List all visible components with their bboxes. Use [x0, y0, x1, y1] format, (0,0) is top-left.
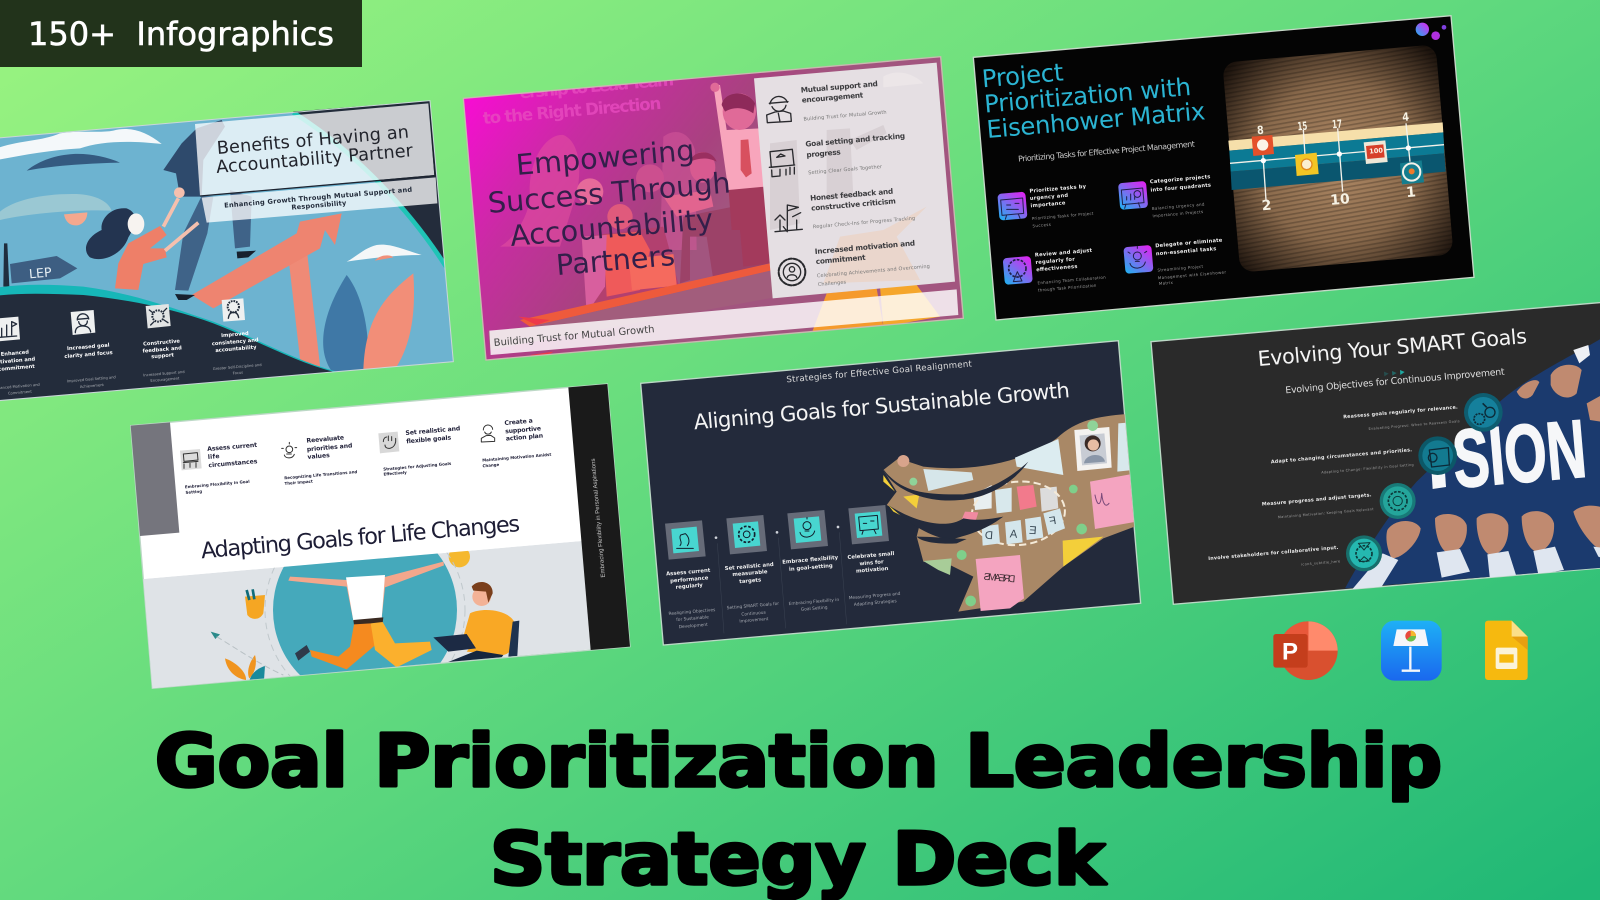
timeline image: 17	[1331, 117, 1343, 131]
step labels: wins for	[859, 559, 884, 567]
icon: PowerPoint	[1273, 621, 1338, 680]
bullet: prioritize tasks: Success	[1032, 222, 1051, 228]
benefit icons and labels: Achievement	[80, 383, 105, 389]
benefit icons and labels: Constructive	[143, 338, 181, 348]
step labels: circumstances	[208, 458, 258, 469]
illustration	[144, 541, 590, 688]
title: Partners	[555, 238, 676, 282]
timeline image: 1	[1405, 184, 1417, 201]
step labels: action plan	[506, 432, 543, 443]
timeline image	[1222, 44, 1454, 273]
photo: VISION team hands	[1345, 318, 1600, 590]
subtitle: Strategies for Effective Goal Realignment	[786, 359, 973, 385]
title: Empowering	[515, 133, 696, 182]
collage image: A	[1009, 528, 1018, 541]
benefit icons and labels: Commitment	[8, 390, 33, 396]
right info panel: Celebrating Achievements and Overcoming	[817, 264, 930, 279]
bullet: prioritize tasks: urgency and	[1030, 193, 1069, 202]
step labels: motivation	[856, 566, 889, 575]
bullet: review and adjust: through Task Prioritization	[1038, 283, 1097, 293]
title: Success Through	[486, 165, 732, 220]
step labels: Involve stakeholders for collaborative input.	[1208, 545, 1339, 562]
right sidebar	[568, 384, 630, 650]
decorative dots	[1416, 23, 1446, 40]
step captions: for Sustainable	[676, 614, 709, 623]
step labels: flexible goals	[406, 434, 452, 445]
bullet: delegate or eliminate: Delegate or eliminate	[1155, 238, 1223, 249]
right info panel: Setting Clear Goals Together	[808, 164, 883, 176]
panel: slide Evolving Your SMART Goals	[1151, 300, 1600, 604]
step captions: Embracing Flexibility in Goal	[185, 479, 250, 489]
step captions: Recognizing Life Transitions and	[284, 469, 358, 480]
benefit icons and labels: Improved Goal Setting and	[67, 375, 116, 383]
step captions: Adapting to Change: Flexibility in Goal Setting	[1321, 463, 1414, 475]
collage image	[883, 414, 1143, 612]
bullet: review and adjust	[1003, 248, 1106, 293]
title: Adapting Goals for Life Changes	[200, 511, 521, 564]
icon: PowerPoint: P	[1282, 638, 1298, 665]
title: Accountability	[509, 202, 714, 253]
title: Aligning Goals for Sustainable Growth	[693, 378, 1071, 434]
title box: Enhancing Growth Through Mutual Support and	[224, 186, 413, 210]
step labels: performance	[670, 575, 709, 585]
badge: 150+ Infographics	[0, 0, 362, 67]
subtitle: Evolving Objectives for Continuous Improvement	[1285, 367, 1505, 396]
step labels: Assess current	[207, 442, 257, 453]
bullet: delegate or eliminate: Management with Eisenhower	[1158, 269, 1227, 280]
right info panel: commitment	[815, 253, 866, 266]
bullet: prioritize tasks: importance	[1030, 200, 1066, 209]
bullet: delegate or eliminate: Matrix	[1159, 280, 1174, 286]
collage image: F	[1048, 515, 1057, 528]
benefit icons and labels: feedback and	[142, 345, 182, 355]
title box: Responsibility	[291, 199, 347, 212]
title	[486, 133, 732, 282]
step labels: Reassess goals regularly for relevance.	[1343, 405, 1458, 420]
step captions: Maintaining Motivation Amidst	[482, 452, 552, 463]
bullet: categorize projects	[1118, 174, 1211, 218]
step icons	[180, 425, 495, 470]
step labels: Create a	[504, 418, 533, 427]
right info panel: progress	[806, 147, 842, 159]
step icons	[665, 505, 889, 633]
benefit icons and labels: Greater Self-Discipline and	[213, 363, 262, 371]
right info panel: Increased motivation and	[814, 238, 915, 256]
bullet: categorize projects: Categorize projects	[1150, 174, 1211, 185]
right info panel: Honest feedback and	[810, 187, 894, 203]
step captions: Adapting Strategies	[854, 598, 898, 608]
panel: slide Adapting Goals for Life Changes	[131, 384, 630, 710]
right sidebar: Embracing Flexibility in Personal Aspirations	[591, 458, 607, 578]
step labels	[207, 418, 543, 469]
benefit icons and labels: support	[151, 352, 175, 360]
panel: slide Benefits of Having an Accountability Partner: LEP	[28, 264, 53, 281]
title: Eisenhower Matrix	[985, 96, 1206, 144]
bullet: delegate or eliminate: Streamlining Project	[1157, 264, 1204, 273]
bullet: delegate or eliminate	[1123, 238, 1227, 286]
title box: Benefits of Having an	[216, 123, 410, 159]
step icons	[1346, 393, 1503, 571]
step labels	[666, 551, 895, 591]
timeline image: 15	[1297, 119, 1308, 133]
title: Prioritization with	[983, 72, 1192, 119]
step labels: values	[307, 452, 330, 461]
step captions: Development	[678, 622, 708, 630]
collage image: D	[984, 530, 993, 542]
icon: Google Slides	[1485, 621, 1528, 680]
icon: Keynote	[1381, 621, 1442, 681]
step labels: Measure progress and adjust targets.	[1262, 492, 1372, 508]
title box	[195, 101, 437, 223]
step captions: Realigning Objectives	[668, 607, 716, 617]
badge: 150+ Infographics: 150+ Infographics	[28, 15, 334, 53]
bullet: categorize projects: into four quadrants	[1150, 182, 1211, 194]
caption bar	[489, 289, 958, 355]
benefit icons and labels: Improved	[221, 331, 249, 339]
right info panel: Challenges	[818, 280, 847, 288]
step captions: Evaluating Progress: When to Reassess Goals	[1368, 419, 1460, 431]
benefit icons and labels: accountability	[215, 345, 257, 354]
decorative triangles	[1384, 370, 1405, 376]
caption bar: Building Trust for Mutual Growth	[493, 324, 655, 349]
step labels: priorities and	[307, 442, 353, 453]
bullet: review and adjust: Review and adjust	[1035, 248, 1093, 259]
step captions: Improvement	[739, 616, 769, 625]
panel: slide Benefits of Having an Accountability Partner	[0, 100, 453, 404]
right info panel: encouragement	[801, 90, 864, 105]
step labels: Adapt to changing circumstances and priorities.	[1271, 447, 1412, 465]
bullet: categorize projects: Balancing Urgency and	[1152, 201, 1205, 211]
step captions: Change	[482, 462, 500, 468]
bullet: categorize projects: Importance in Projects	[1152, 209, 1203, 218]
timeline image: 10	[1330, 191, 1351, 209]
step labels: Set realistic and	[725, 562, 774, 572]
main title: Goal Prioritization Leadership	[155, 719, 1442, 803]
benefit icons and labels: Encouragement	[150, 376, 180, 383]
timeline image: 4	[1402, 109, 1410, 124]
timeline image: 100	[1369, 146, 1384, 156]
main title: Strategy Deck	[490, 817, 1107, 900]
panel: slide Empowering Success Through Accountability Partners: ership to Lead Team	[519, 70, 675, 102]
benefit icons and labels: Increased Support and	[143, 370, 185, 377]
right info panel: constructive criticism	[811, 196, 897, 213]
title: Evolving Your SMART Goals	[1257, 324, 1528, 371]
panel: slide Aligning Goals for Sustainable Growth	[641, 341, 1143, 645]
step labels: measurable	[732, 569, 768, 578]
step labels: life	[208, 453, 220, 461]
step captions: Effectively	[383, 470, 407, 477]
timeline image: 2	[1261, 198, 1272, 214]
benefit icons and labels: clarity and focus	[64, 350, 113, 360]
bullet: prioritize tasks	[997, 184, 1094, 228]
benefit icons and labels: Enhanced	[1, 349, 30, 358]
step captions: Strategies for Adjusting Goals	[383, 461, 452, 472]
step captions: Embracing Flexibility in	[788, 597, 840, 607]
step labels: Set realistic and	[405, 425, 461, 437]
step labels: Embrace flexibility	[782, 555, 839, 566]
title	[981, 57, 1206, 144]
panel: slide Project Prioritization with Eisenhower Matrix	[973, 16, 1474, 320]
timeline image: 8	[1256, 123, 1264, 137]
step captions: Setting	[185, 489, 202, 495]
bullet: delegate or eliminate: non-essential tasks	[1156, 246, 1217, 257]
step labels: supportive	[505, 425, 541, 435]
bullet: review and adjust: regularly for	[1035, 257, 1075, 266]
step captions: Their Impact	[284, 479, 313, 486]
step captions: Goal Setting	[801, 605, 828, 613]
bullet: review and adjust: effectiveness	[1036, 264, 1078, 273]
benefit icons and labels: Increased goal	[67, 343, 110, 352]
step captions: Measuring Progress and	[848, 591, 901, 601]
benefit icons and labels	[0, 298, 262, 396]
right info panel: Mutual support and	[800, 79, 878, 95]
right info panel	[754, 63, 955, 298]
step labels: regularly	[675, 582, 704, 591]
panel: slide Empowering Success Through Accountability Partners: to the Right Direction	[482, 94, 662, 128]
bullet: review and adjust: Enhancing Team Collaboration	[1037, 274, 1106, 285]
bullet: prioritize tasks: Prioritizing Tasks for Project	[1032, 211, 1094, 221]
step labels: targets	[739, 577, 761, 585]
step labels: Assess current	[666, 568, 711, 578]
step labels: Reevaluate	[306, 434, 344, 445]
subtitle: Prioritizing Tasks for Effective Project Management	[1018, 140, 1195, 164]
right info panel: Building Trust for Mutual Growth	[803, 110, 887, 123]
benefit icons and labels: Focus	[233, 371, 243, 375]
step captions: Continuous	[741, 610, 767, 618]
panel: slide Empowering Success Through Accountability Partners	[463, 57, 963, 360]
title: Project	[981, 57, 1065, 93]
step captions: Maintaining Motivation: Keeping Goals Relevant	[1278, 507, 1374, 519]
step captions	[1278, 419, 1460, 567]
step captions: icon4_subtitle_here	[1301, 559, 1340, 567]
bullet: prioritize tasks: Prioritize tasks by	[1029, 184, 1087, 195]
main title	[155, 719, 1442, 900]
right info panel: Goal setting and tracking	[805, 131, 905, 149]
right info panel: Regular Check-Ins for Progress Tracking	[813, 216, 915, 230]
collage image: DREAMS	[983, 572, 1016, 585]
step captions: Setting SMART Goals for	[727, 601, 780, 611]
step labels: in goal-setting	[789, 563, 833, 573]
step labels	[1208, 405, 1458, 562]
collage image: E	[1028, 525, 1037, 537]
benefit icons and labels: consistency and	[212, 337, 259, 347]
step labels: Celebrate small	[847, 551, 895, 561]
step captions	[185, 452, 552, 495]
title box: Accountability Partner	[215, 141, 414, 178]
step captions	[668, 591, 901, 630]
